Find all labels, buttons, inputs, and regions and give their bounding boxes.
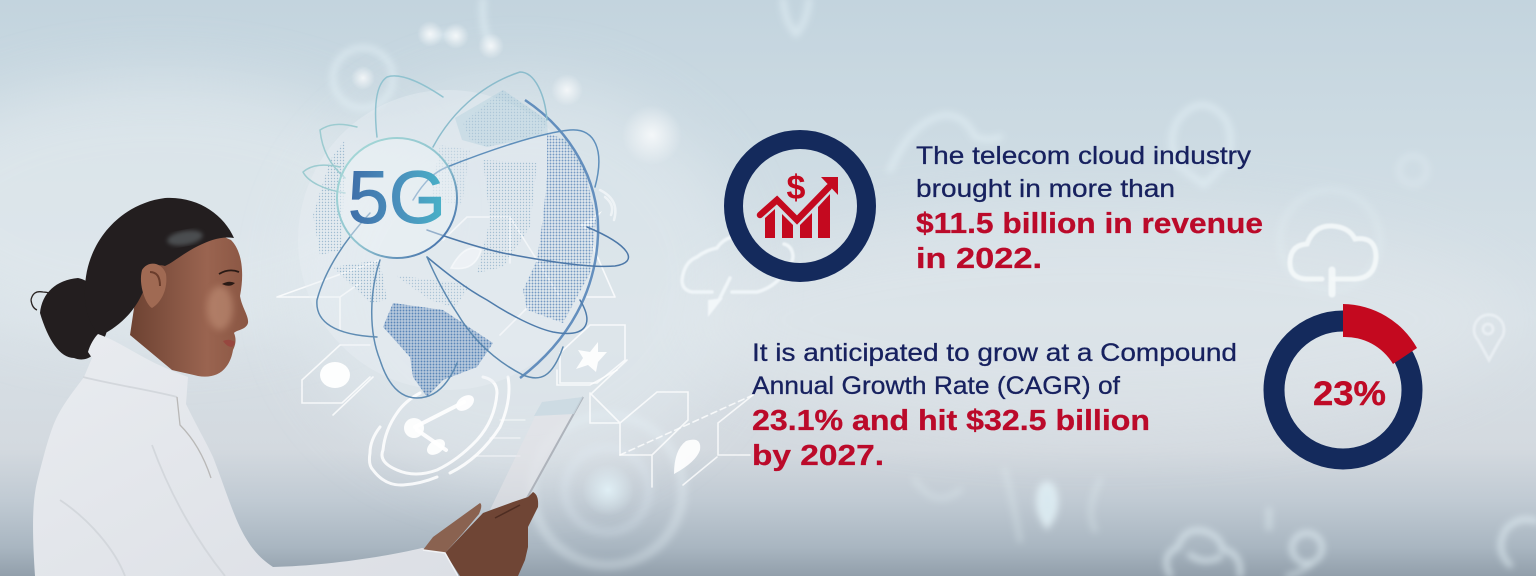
globe body xyxy=(298,90,598,390)
ear xyxy=(141,264,166,308)
globe back wireframe xyxy=(277,190,615,335)
jacket xyxy=(33,334,458,576)
blurred background network icons xyxy=(333,0,1536,576)
donut highlighted segment xyxy=(1343,304,1417,364)
globe limb xyxy=(520,100,598,378)
hand holding tablet xyxy=(423,492,538,576)
woman in white jacket xyxy=(31,198,538,576)
text block: CAGR growth xyxy=(752,339,1237,472)
icon: cloud outline left xyxy=(682,237,793,317)
donut value: 23% xyxy=(1313,375,1386,413)
neck and face xyxy=(130,232,248,377)
text block: revenue xyxy=(916,142,1263,275)
text block: revenue: $11.5 billion in revenue xyxy=(916,208,1263,240)
face highlight xyxy=(207,286,233,330)
network cube with location pin xyxy=(557,370,753,487)
globe with 5G badge xyxy=(298,72,628,398)
text block: CAGR growth: Annual Growth Rate (CAGR) of xyxy=(752,372,1120,400)
icon: chat hexagon xyxy=(302,345,373,415)
hair bun xyxy=(31,278,108,359)
5G badge: 5G xyxy=(348,156,446,239)
text block: revenue: in 2022. xyxy=(916,243,1042,275)
text block: CAGR growth: 23.1% and hit $32.5 billion xyxy=(752,405,1150,437)
icon: dollar chart: $ xyxy=(787,169,806,207)
text block: CAGR growth: by 2027. xyxy=(752,440,884,472)
hair sheen xyxy=(166,228,204,248)
text block: revenue: brought in more than xyxy=(916,175,1175,203)
5G badge xyxy=(337,138,457,258)
continents xyxy=(313,90,596,397)
orbit lines xyxy=(303,72,628,398)
icon: share symbol with concentric rings xyxy=(369,377,525,485)
icon: star hexagon xyxy=(560,325,627,393)
hair xyxy=(85,198,234,336)
eye, brow and lips xyxy=(219,270,239,347)
icon: location pin right xyxy=(1474,315,1504,360)
text block: revenue: The telecom cloud industry xyxy=(916,142,1252,170)
text block: CAGR growth: It is anticipated to grow at a Compound xyxy=(752,339,1237,367)
icon ring: revenue growth xyxy=(734,140,866,272)
network hexagon overlays xyxy=(277,190,753,487)
icon: cloud outline right xyxy=(1290,226,1376,294)
tablet xyxy=(490,397,583,510)
background glows xyxy=(351,21,682,516)
jacket folds xyxy=(60,377,225,576)
donut chart: 23% xyxy=(1274,304,1417,459)
